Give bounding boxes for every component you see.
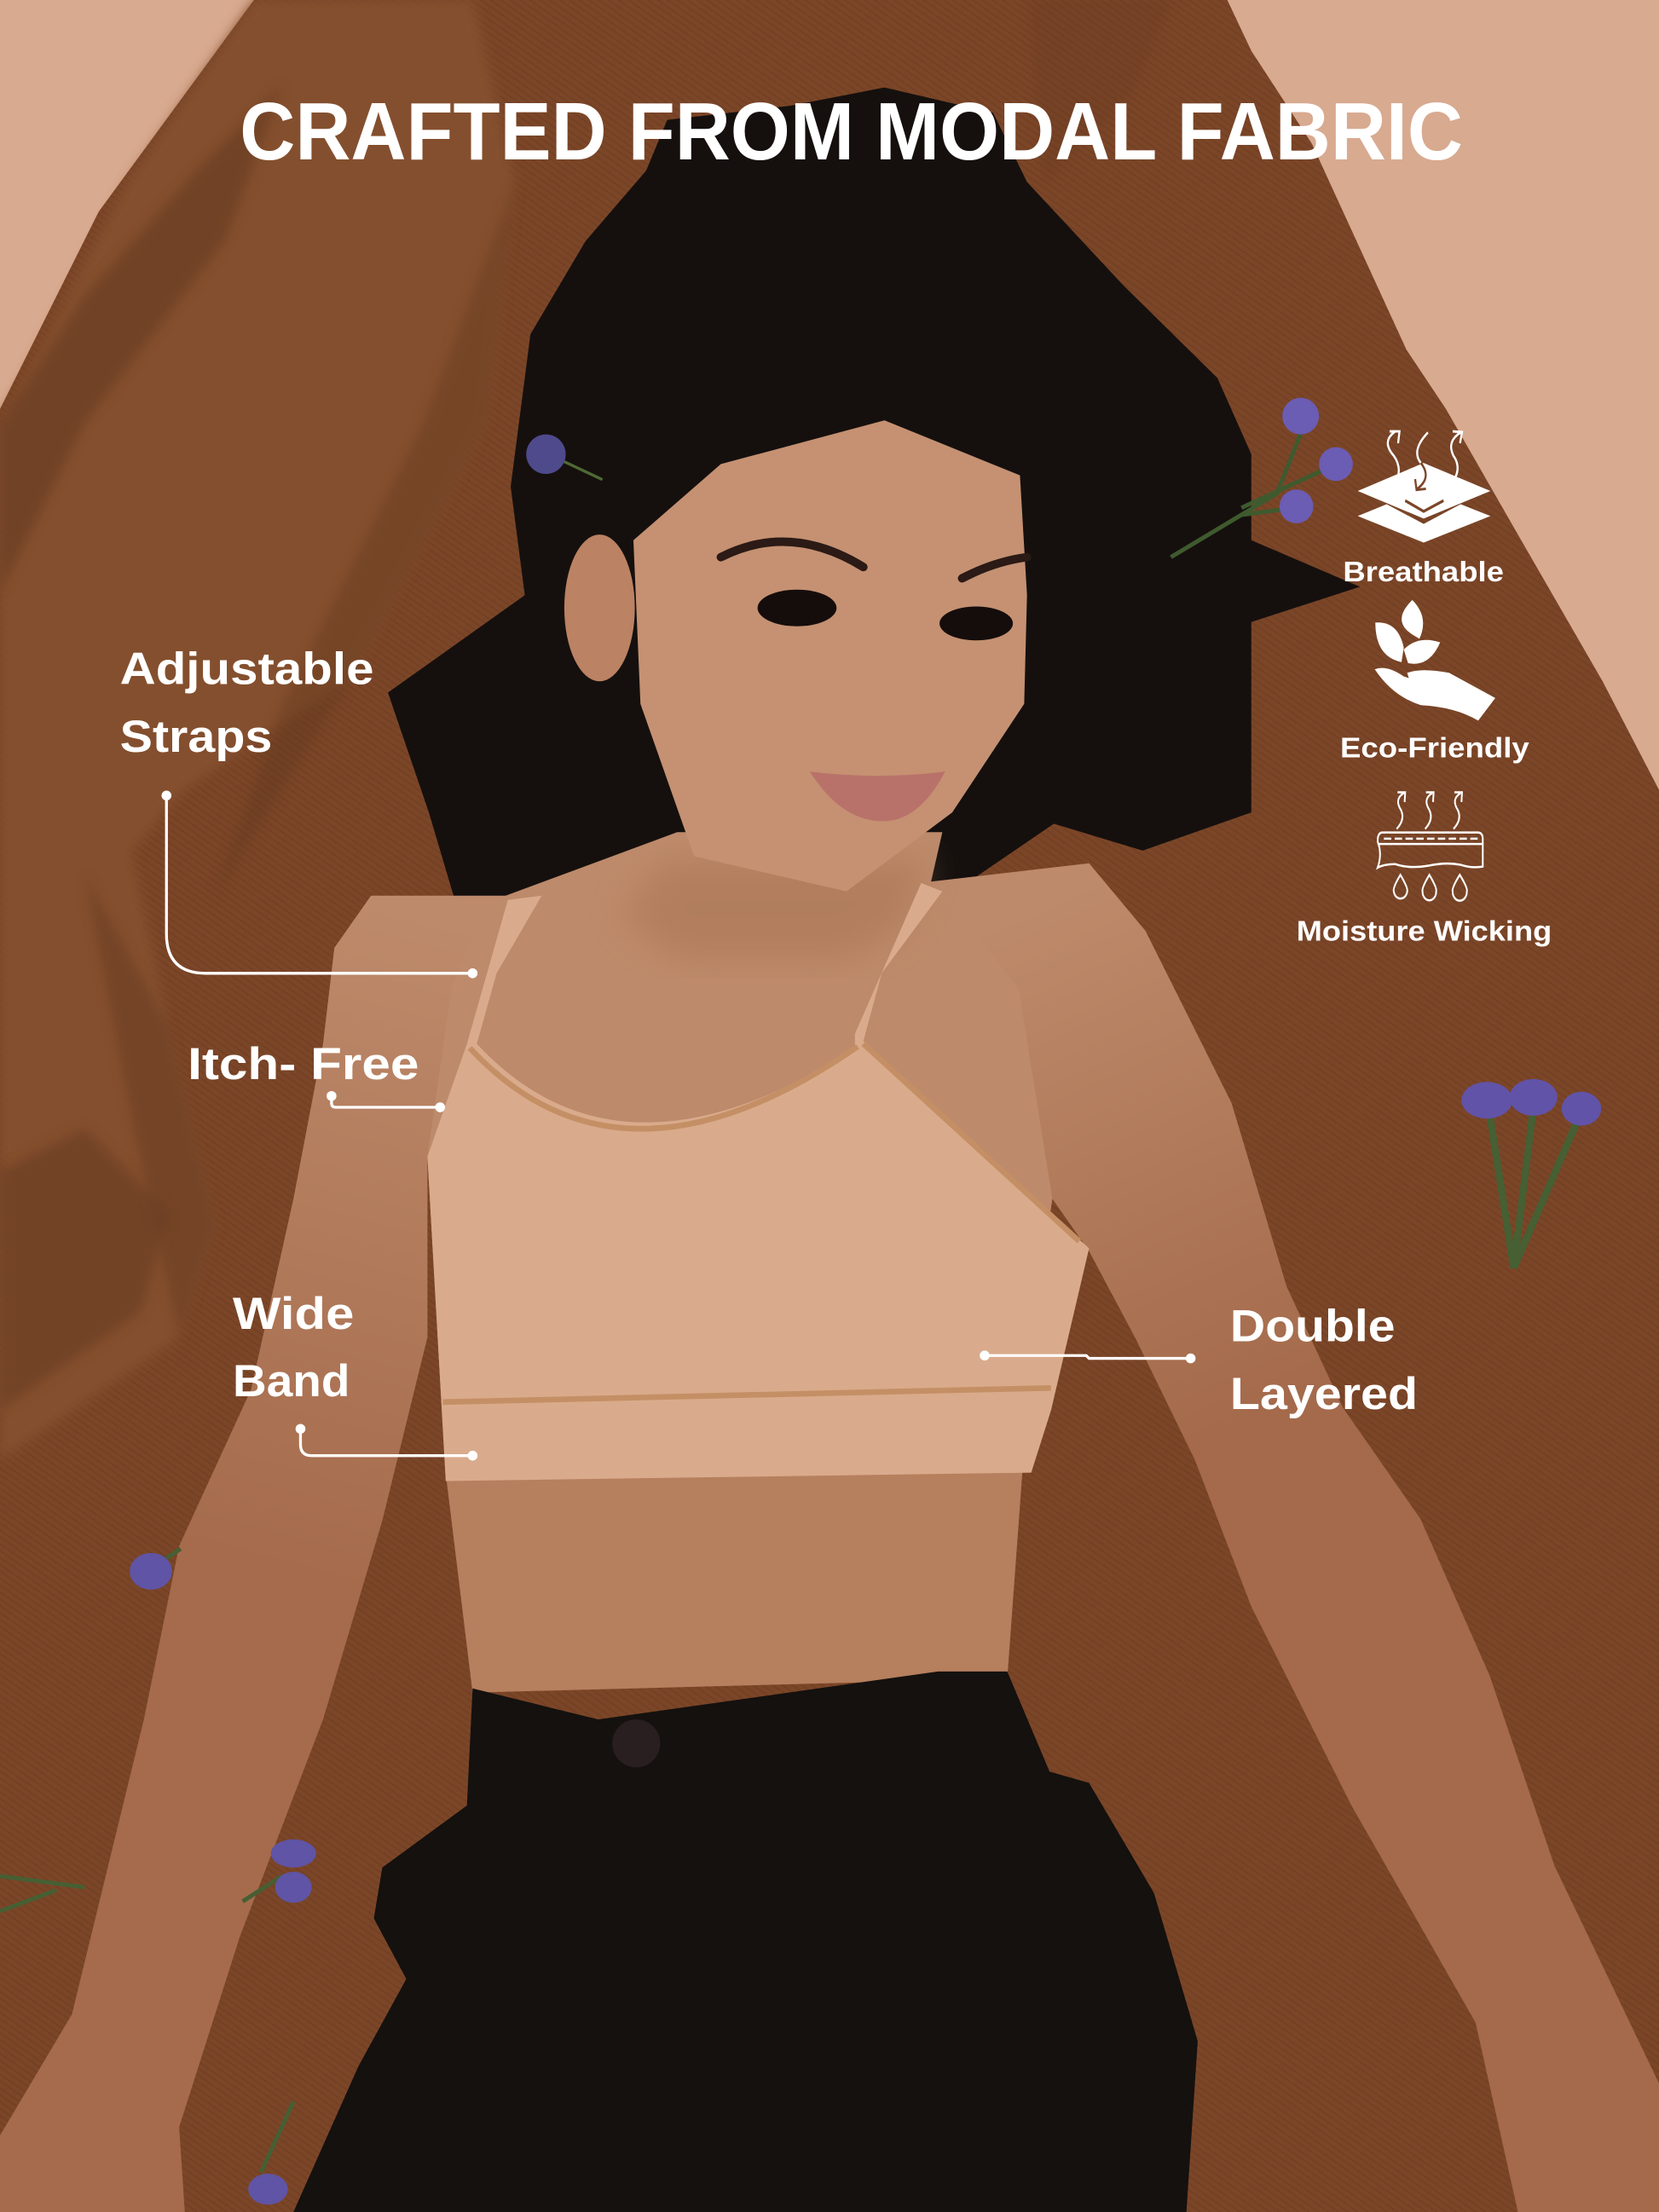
mouth: [810, 771, 945, 821]
callout: wide band: [233, 1289, 477, 1461]
callout: adjustable straps: [120, 644, 477, 979]
callout: double layered: Layered: [1230, 1369, 1418, 1419]
callout: wide band: Band: [233, 1356, 350, 1406]
left arm: [0, 896, 529, 2212]
ear: [564, 534, 635, 681]
chest: [427, 832, 1052, 1481]
shorts: [293, 1672, 1198, 2212]
callout: itch-free: [188, 1039, 445, 1112]
flowers near hair: [526, 398, 1353, 557]
right arm: [931, 863, 1659, 2212]
cloth fold on the left: [0, 0, 1171, 1460]
label: breathable: Breathable: [1343, 557, 1504, 588]
callout: wide band: Wide: [233, 1289, 354, 1339]
callout: double layered: [980, 1302, 1418, 1419]
flowers on the right: [1461, 1079, 1601, 1268]
callout: itch-free: Itch- Free: [188, 1039, 419, 1089]
icon: leaves in hand: [1375, 600, 1495, 720]
eyes: [758, 590, 1013, 640]
label: moisture wicking: Moisture Wicking: [1297, 916, 1552, 948]
midriff: [446, 1467, 1023, 1693]
brows: [721, 541, 1027, 578]
face: [633, 420, 1027, 892]
callout: adjustable straps: Straps: [120, 712, 272, 762]
callout: double layered: Double: [1230, 1302, 1396, 1352]
icon: breathable layers: [1358, 431, 1490, 543]
garment: [427, 883, 1089, 1481]
hair: [388, 88, 1360, 903]
callout: adjustable straps: Adjustable: [120, 644, 374, 695]
icon: moisture wicking: [1378, 793, 1483, 901]
scattered flowers lower left: [0, 1549, 316, 2204]
garment seams: [443, 1044, 1079, 1402]
shorts button: [612, 1719, 660, 1767]
neck shading: [621, 860, 931, 959]
label: eco-friendly: Eco-Friendly: [1340, 733, 1529, 765]
title: CRAFTED FROM MODAL FABRIC: [240, 86, 1463, 177]
